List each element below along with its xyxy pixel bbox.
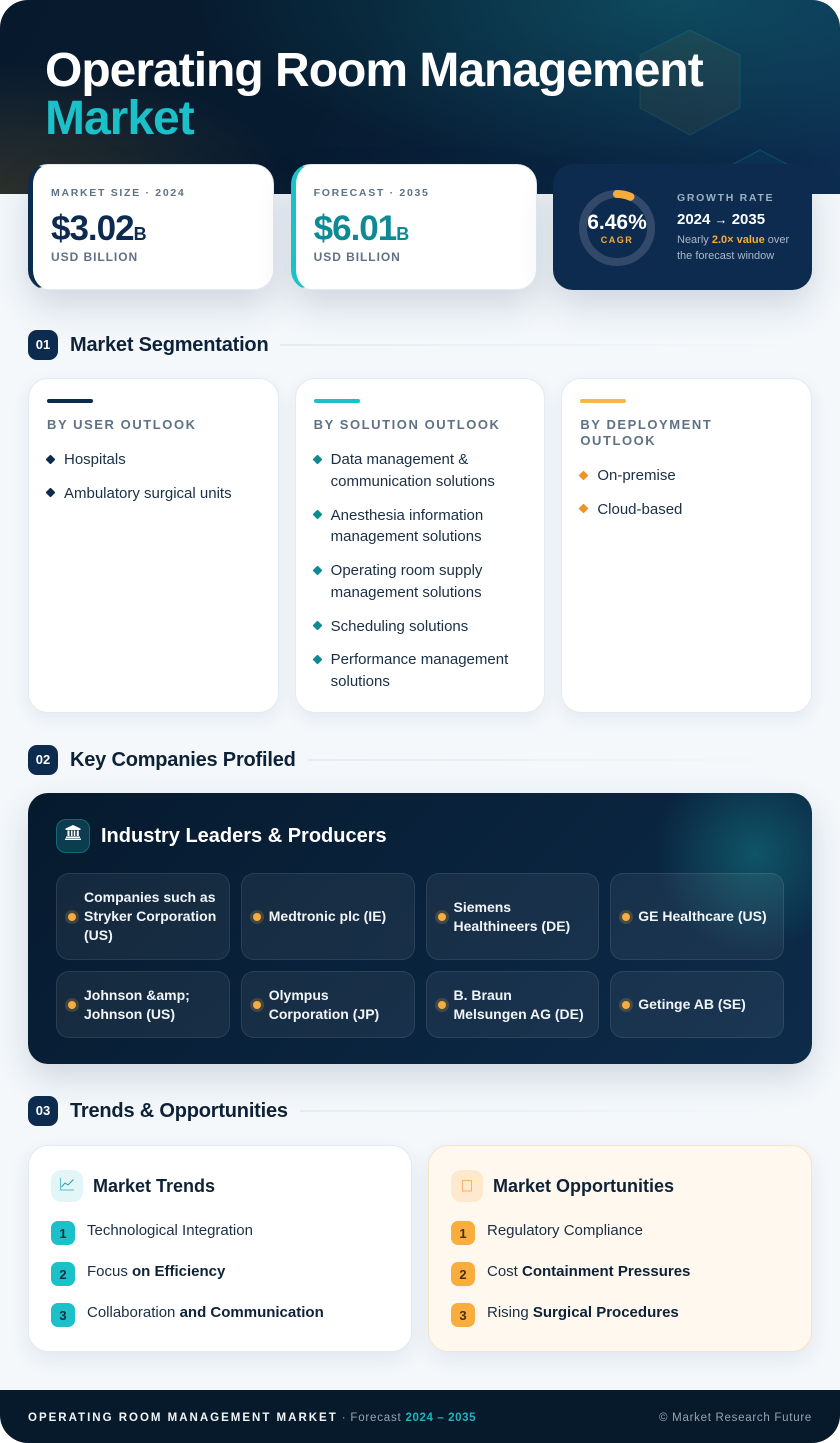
growth note: Nearly 2.0× value over (677, 234, 789, 246)
CAGR ring: 6.46% (587, 211, 647, 234)
trends heading: Market Trends (93, 1176, 215, 1196)
trend 3 (51, 1303, 75, 1327)
footer (0, 1390, 840, 1443)
stat card: market size: MARKET SIZE · 2024 (51, 187, 185, 199)
stat card: growth rate (553, 164, 812, 290)
panel: market opportunities: Rising Surgical Procedures (487, 1304, 679, 1321)
panel: industry leaders (28, 793, 812, 1064)
company: Johnson: Johnson &amp; Johnson (US) (84, 986, 190, 1022)
header banner (0, 0, 840, 194)
stat card: forecast: $6.01B (314, 209, 409, 248)
icon: chart (51, 1170, 83, 1202)
icon: missing glyph box (451, 1170, 483, 1202)
company: Siemens: Siemens Healthineers (DE) (454, 898, 570, 934)
panel: market opportunities: Cost Containment Pressures (487, 1263, 690, 1280)
company: Getinge (610, 971, 784, 1038)
opportunity 3: 3 (459, 1308, 467, 1323)
company: Stryker (56, 873, 230, 960)
panel: market trends: Collaboration and Communication (87, 1304, 324, 1321)
company: GE: GE Healthcare (US) (638, 908, 767, 924)
panel: market trends: Technological Integration (87, 1222, 253, 1239)
panel: by user outlook: Ambulatory surgical units (64, 484, 232, 502)
panel: by deployment outlook: BY DEPLOYMENT OUTLOOK (580, 417, 712, 448)
section heading: key companies (28, 745, 522, 775)
decorative hexagons (640, 30, 810, 176)
stat card: market size: $3.02B (51, 209, 147, 248)
company: Medtronic: Medtronic plc (IE) (269, 908, 386, 924)
footer credit: © Market Research Future (659, 1412, 812, 1424)
growth note: the forecast window (677, 250, 774, 262)
growth rate label: GROWTH RATE (677, 192, 774, 204)
panel: by solution outlook: Scheduling solutions (331, 618, 468, 634)
trend 1: 1 (59, 1226, 67, 1241)
company: Medtronic (241, 873, 414, 960)
panel: by solution outlook: Anesthesia information management solutions (331, 506, 483, 545)
title: Market (45, 92, 194, 145)
section heading: key companies: 02 (36, 752, 50, 767)
opportunity 3 (451, 1303, 475, 1327)
company: B. Braun (426, 971, 599, 1038)
title: Operating Room Management (45, 44, 703, 97)
panel: by deployment outlook (561, 378, 812, 713)
opportunity 1: 1 (459, 1226, 467, 1241)
panel: market trends (28, 1145, 412, 1352)
title (45, 44, 704, 145)
company: Siemens (426, 873, 599, 960)
section heading: trends: Trends & Opportunities (70, 1100, 288, 1122)
company: Olympus: Olympus Corporation (JP) (269, 986, 379, 1022)
panel: by user outlook: BY USER OUTLOOK (47, 417, 197, 432)
trend 2 (51, 1262, 75, 1286)
trend 3: 3 (59, 1308, 67, 1323)
panel title: Industry Leaders & Producers (101, 825, 387, 847)
panel: by solution outlook: BY SOLUTION OUTLOOK (314, 417, 501, 432)
stat card: forecast: FORECAST · 2035 (314, 187, 430, 199)
section heading: market segmentation (28, 330, 506, 360)
stat card: forecast (291, 164, 537, 290)
panel: by user outlook: Hospitals (64, 451, 126, 468)
section heading: market segmentation: Market Segmentation (70, 334, 268, 356)
stat card: forecast: USD BILLION (314, 250, 401, 264)
growth note (677, 234, 789, 262)
opportunity 1 (451, 1221, 475, 1245)
CAGR ring: CAGR (601, 235, 633, 245)
company: Olympus (241, 971, 414, 1038)
panel: by solution outlook: Operating room supply management solutions (331, 562, 482, 601)
company: Getinge: Getinge AB (SE) (638, 996, 746, 1012)
company: B. Braun: B. Braun Melsungen AG (DE) (454, 986, 584, 1022)
panel: by solution outlook: Data management & communication solutions (331, 451, 495, 490)
stat card: market size: USD BILLION (51, 250, 138, 264)
company: Johnson (56, 971, 230, 1038)
panel: by deployment outlook: On-premise (597, 467, 676, 484)
section heading: key companies: Key Companies Profiled (70, 749, 296, 771)
CAGR ring (579, 190, 655, 266)
panel: by deployment outlook: Cloud-based (597, 500, 682, 518)
section heading: trends: 03 (36, 1103, 50, 1118)
opportunities heading: Market Opportunities (493, 1176, 674, 1196)
growth period: 2024 → 2035 (677, 211, 765, 228)
panel: market opportunities: Regulatory Compliance (487, 1222, 643, 1239)
panel: by user outlook (28, 378, 279, 713)
trend 2: 2 (59, 1267, 67, 1282)
stat card: market size (28, 164, 274, 290)
section heading: trends (28, 1096, 518, 1126)
trend 1 (51, 1221, 75, 1245)
panel: market trends: Focus on Efficiency (87, 1263, 225, 1280)
footer title: OPERATING ROOM MANAGEMENT MARKET · Forecast 2024 – 2035 (28, 1412, 476, 1424)
panel: by solution outlook (295, 378, 545, 713)
section heading: market segmentation: 01 (36, 337, 50, 352)
panel: by solution outlook: Performance management solutions (331, 651, 508, 690)
opportunity 2: 2 (459, 1267, 467, 1282)
company: GE (610, 873, 784, 960)
company: Stryker: Companies such as Stryker Corporation (US) (84, 889, 216, 943)
panel: market opportunities (428, 1145, 812, 1352)
opportunity 2 (451, 1262, 475, 1286)
icon: bank building (56, 819, 90, 853)
